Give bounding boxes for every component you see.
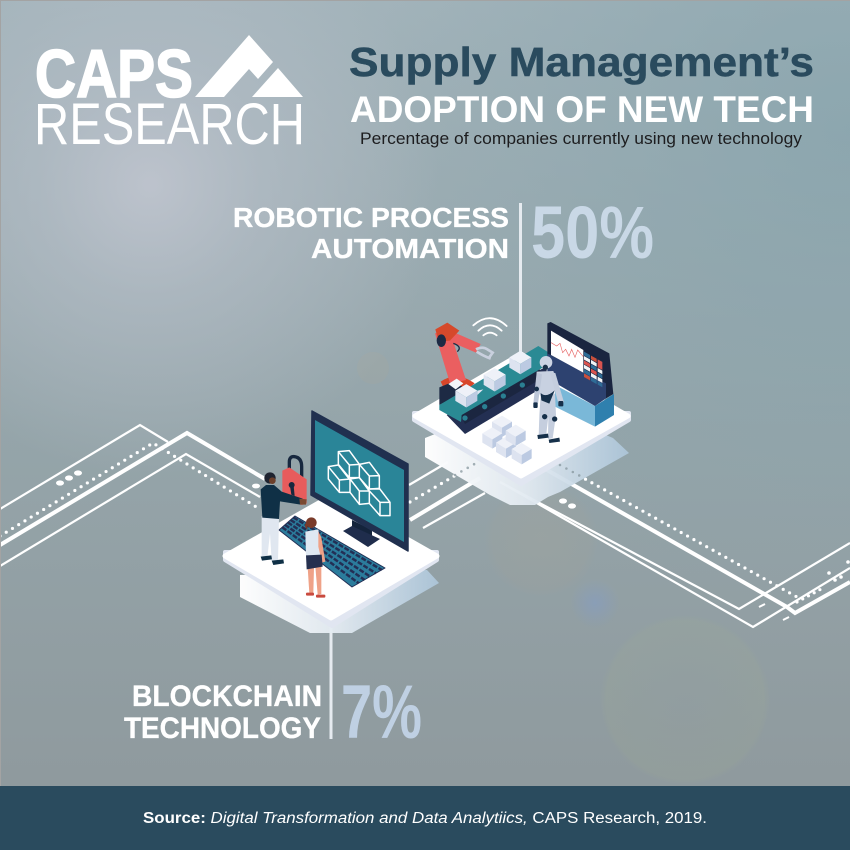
lower platform layer xyxy=(425,400,629,505)
woman figure xyxy=(305,517,325,598)
label: robotic process automation: AUTOMATION xyxy=(311,233,509,264)
connector line: blockchain xyxy=(330,625,332,739)
data table xyxy=(584,352,602,387)
logo mountain xyxy=(195,35,303,97)
conveyor belt xyxy=(439,346,550,434)
stacked boxes xyxy=(482,416,532,464)
logo wordmark RESEARCH: RESEARCH xyxy=(34,92,305,157)
circuit node dots xyxy=(56,470,850,582)
factory illustration xyxy=(435,318,614,464)
label: blockchain technology: BLOCKCHAIN xyxy=(132,680,322,713)
platform side xyxy=(414,413,629,484)
title line 2: ADOPTION OF NEW TECH xyxy=(350,89,814,130)
blockchain cube outlines xyxy=(328,451,390,516)
label: robotic process automation: ROBOTIC PROCESS xyxy=(233,202,509,233)
keyboard xyxy=(279,516,385,587)
label: blockchain technology xyxy=(124,680,322,745)
title xyxy=(349,39,814,148)
robot arm xyxy=(435,323,493,393)
background circuit lines xyxy=(0,425,850,627)
computer monitor xyxy=(311,411,408,551)
platform top xyxy=(225,496,437,618)
stat: 7%: 7% xyxy=(341,670,422,755)
logo wordmark CAPS: CAPS xyxy=(35,36,193,112)
padlock xyxy=(282,457,307,505)
connector line: robotic process automation xyxy=(519,203,522,354)
man figure xyxy=(261,472,307,565)
logo: CAPS Research xyxy=(34,35,305,157)
platform side xyxy=(225,552,437,626)
platform top xyxy=(415,354,628,476)
wifi icon xyxy=(473,318,507,335)
humanoid robot xyxy=(533,356,564,443)
label: blockchain technology: TECHNOLOGY xyxy=(124,712,321,745)
stat: 50%: 50% xyxy=(531,191,654,274)
see-through circuit dots on lower layer xyxy=(455,462,582,477)
subtitle: Percentage of companies currently using new technology xyxy=(360,130,803,148)
source note: Source: Digital Transformation and Data Analytiics, CAPS Research, 2019. xyxy=(143,810,707,827)
platform: blockchain technology xyxy=(225,411,439,633)
title line 1: Supply Management’s xyxy=(349,39,814,85)
label: robotic process automation xyxy=(233,202,509,264)
footer band xyxy=(0,786,850,850)
conveyor boxes xyxy=(448,351,531,408)
lower platform layer xyxy=(240,570,439,633)
control panel with screen xyxy=(547,322,614,427)
platform: robotic process automation xyxy=(414,318,629,505)
lens flares xyxy=(357,352,770,785)
